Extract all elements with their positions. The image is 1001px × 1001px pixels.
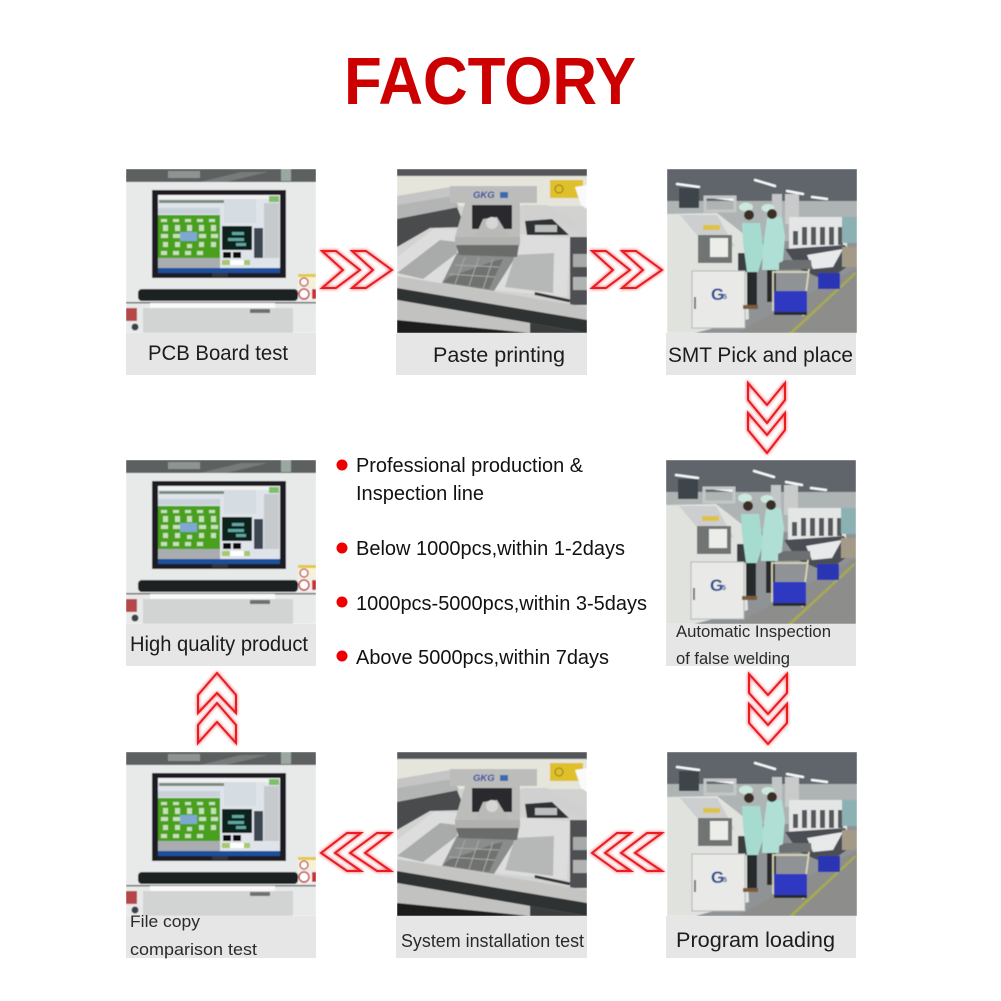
panel: PCB Board test	[126, 169, 316, 375]
panel: High quality product	[126, 460, 316, 666]
panel: PCB Board test: PCB Board test	[148, 342, 288, 365]
panel: File copy comparison test: File copy	[130, 912, 201, 931]
arrow: Paste printing to SMT Pick and place	[592, 251, 662, 288]
panel: Paste printing	[396, 169, 587, 375]
panel: Program loading: Program loading	[676, 929, 835, 952]
panel: System installation test: System installation test	[401, 931, 584, 951]
arrow: Automatic Inspection to Program loading	[749, 674, 787, 744]
panel: High quality product: High quality product	[130, 633, 308, 656]
panel: SMT Pick and place	[666, 169, 857, 375]
arrow: PCB Board test to Paste printing	[322, 251, 392, 288]
title: FACTORY	[344, 44, 636, 119]
text block: production capacity bullets: Below 1000pcs,within 1-2days	[356, 538, 625, 560]
text block: production capacity bullets: Professional production &	[356, 455, 584, 477]
panel: Program loading	[666, 752, 857, 958]
panel: System installation test	[396, 752, 587, 958]
panel: File copy comparison test	[126, 752, 316, 959]
text block: production capacity bullets	[336, 455, 647, 669]
panel: SMT Pick and place: SMT Pick and place	[668, 344, 853, 367]
panel: Paste printing: Paste printing	[433, 344, 565, 367]
text block: production capacity bullets: 1000pcs-5000pcs,within 3-5days	[356, 593, 647, 615]
panel: File copy comparison test: comparison test	[130, 940, 257, 959]
arrow: File copy comparison test to High quality product	[198, 673, 236, 743]
arrow: System installation test to File copy comparison test	[321, 833, 391, 871]
arrow: Program loading to System installation test	[592, 833, 662, 871]
panel: Automatic Inspection of false welding: Automatic Inspection	[676, 622, 831, 641]
arrow: SMT Pick and place to Automatic Inspection	[748, 383, 785, 453]
panel: Automatic Inspection of false welding	[666, 460, 856, 668]
panel: Automatic Inspection of false welding: of false welding	[676, 649, 790, 668]
text block: production capacity bullets: Inspection line	[356, 483, 484, 505]
text block: production capacity bullets: Above 5000pcs,within 7days	[356, 647, 609, 669]
